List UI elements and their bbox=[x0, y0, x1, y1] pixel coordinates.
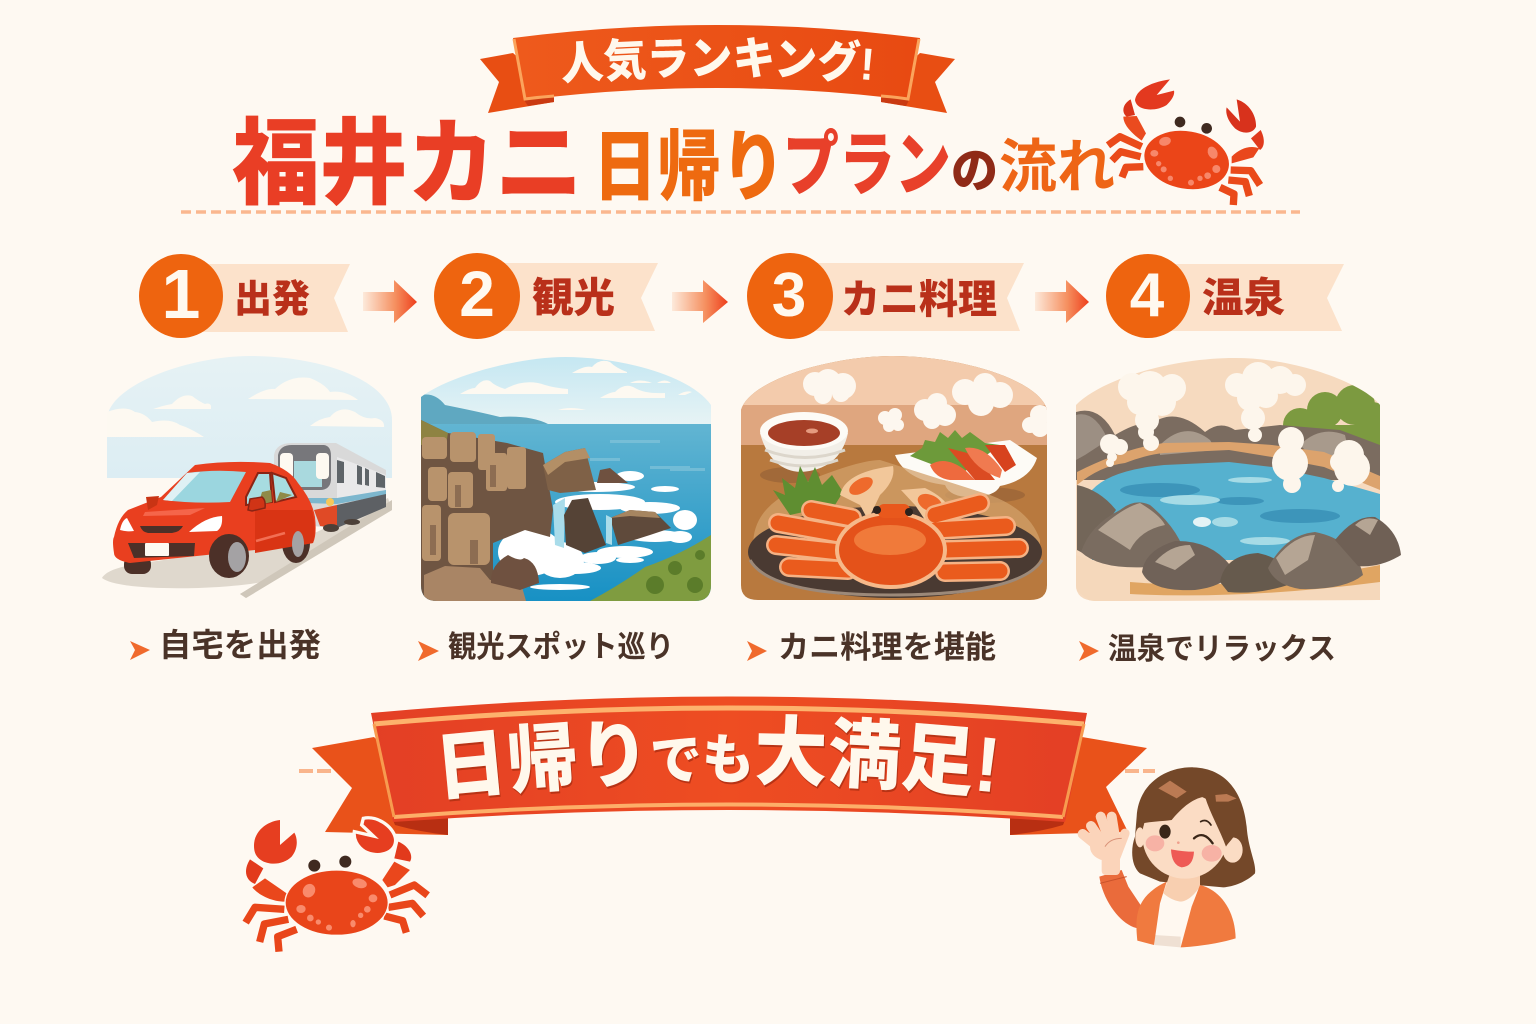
banner side dashes bbox=[299, 769, 1155, 773]
raised arm bbox=[1099, 870, 1142, 928]
illustration: car and train departure bbox=[102, 356, 392, 598]
main title: 日帰り bbox=[593, 125, 785, 211]
main title: プラン bbox=[783, 126, 951, 204]
jacket bbox=[1136, 882, 1167, 945]
main title: 福井カニ bbox=[232, 111, 583, 216]
caption 1: 自宅を出発 bbox=[159, 627, 321, 663]
ranking ribbon banner bbox=[480, 25, 955, 113]
cut claws bbox=[840, 466, 893, 520]
step 1 header bbox=[139, 254, 350, 338]
steam plumes bbox=[1100, 362, 1370, 493]
step 3 header bbox=[747, 253, 1024, 339]
step 1 header: 出発 bbox=[234, 279, 310, 321]
foliage bbox=[590, 535, 711, 601]
closing banner text: 日帰りでも大満足! bbox=[442, 714, 996, 802]
neck bbox=[1163, 873, 1200, 902]
arrow 2 to 3 bbox=[672, 280, 728, 323]
green bush bbox=[1283, 385, 1390, 445]
caption 4: 温泉でリラックス bbox=[1108, 633, 1336, 666]
surf foam bbox=[498, 471, 697, 590]
cliff rocks bbox=[421, 420, 553, 601]
sashimi dish bbox=[895, 430, 1037, 503]
shirt bbox=[1154, 887, 1200, 947]
crab shell bbox=[837, 513, 945, 587]
car bbox=[113, 462, 316, 578]
garnish leaves bbox=[773, 466, 843, 515]
eyes and mouth bbox=[1159, 825, 1171, 839]
step 2 header: 2 bbox=[459, 258, 495, 330]
icon: crab bottom left bbox=[246, 818, 428, 952]
hair back bbox=[1132, 767, 1255, 887]
step 2 header: 観光 bbox=[532, 275, 615, 321]
hand bbox=[1083, 817, 1125, 875]
ground and road bbox=[102, 498, 392, 598]
step 4 header bbox=[1106, 254, 1344, 338]
illustration: coastal cliffs bbox=[421, 357, 711, 604]
step 3 header: カニ料理 bbox=[841, 278, 997, 322]
back rocks bbox=[1076, 411, 1380, 480]
wooden rim bbox=[1077, 442, 1380, 490]
distant headland bbox=[421, 394, 548, 424]
step 1 header: 1 bbox=[162, 255, 200, 333]
illustration: crab dishes bbox=[741, 356, 1050, 606]
water bbox=[1092, 462, 1380, 560]
main title: の bbox=[951, 145, 998, 198]
hot plate bbox=[753, 460, 1040, 560]
train bbox=[274, 443, 386, 532]
arrow 3 to 4 bbox=[1035, 280, 1089, 323]
arrow 1 to 2 bbox=[363, 280, 417, 323]
sea bbox=[421, 424, 711, 604]
crab legs bbox=[776, 503, 1019, 572]
icon: waving woman bbox=[1083, 767, 1255, 947]
step 4 header: 温泉 bbox=[1202, 275, 1285, 321]
closing ribbon banner bbox=[312, 696, 1147, 835]
ranking banner text: 人気ランキング! bbox=[562, 37, 872, 84]
title dashed divider bbox=[181, 210, 1300, 214]
front rocks bbox=[1077, 485, 1401, 593]
step 3 header: 3 bbox=[772, 261, 806, 330]
caption 2: 観光スポット巡り bbox=[448, 631, 674, 664]
sky clouds bbox=[460, 361, 692, 410]
caption 3: カニ料理を堪能 bbox=[778, 630, 996, 665]
step 2 header bbox=[434, 253, 658, 339]
icon: crab top right bbox=[1108, 79, 1264, 205]
steam clouds bbox=[803, 369, 1050, 437]
sand bbox=[1076, 586, 1355, 601]
illustration: hot spring bbox=[1076, 358, 1401, 608]
step 4 header: 4 bbox=[1130, 261, 1165, 330]
main title bbox=[232, 111, 1115, 216]
main title: 流れ bbox=[999, 135, 1115, 200]
face bbox=[1142, 793, 1228, 879]
sauce bowl bbox=[760, 412, 848, 483]
bangs bbox=[1138, 768, 1240, 847]
sky dome bbox=[107, 356, 392, 478]
